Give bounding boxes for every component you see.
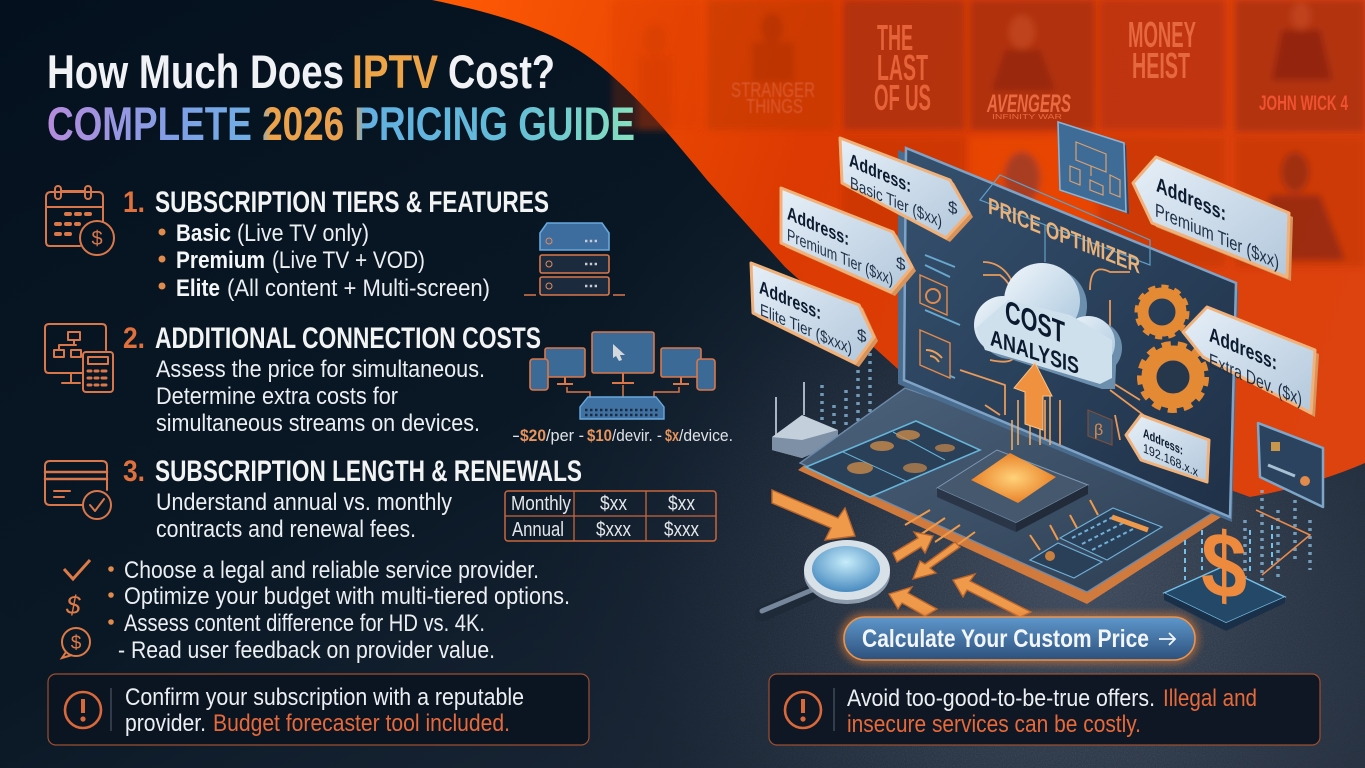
- poster row two: [843, 137, 1365, 267]
- tag: elite tier: Elite Tier ($xxx): [760, 300, 852, 358]
- callout text: insecure services can be costly.: [847, 711, 1141, 738]
- tag: premium tier right: Address:: [1156, 172, 1226, 226]
- illustration: price optimizer: [751, 122, 1323, 664]
- section 3: subscription length: [45, 455, 716, 543]
- device prices: $x: [665, 426, 679, 445]
- heading: SUBSCRIPTION TIERS & FEATURES: [155, 186, 549, 219]
- tag: premium tier right: [1133, 157, 1293, 281]
- description: [156, 356, 485, 437]
- title: COMPLETE 2026 PRICING GUIDE: [47, 97, 635, 150]
- tag: premium tier right: Premium Tier ($xx): [1155, 200, 1279, 274]
- description: Determine extra costs for: [156, 383, 398, 410]
- title: [47, 45, 635, 150]
- device prices: /device.: [679, 426, 733, 445]
- callout text: Illegal and: [1163, 685, 1257, 712]
- poster: Avengers: INFINITY WAR: [992, 114, 1062, 121]
- poster: Avengers: AVENGERS: [986, 90, 1071, 118]
- device prices: -: [512, 426, 520, 445]
- tag: extra device: Extra Dev. ($x): [1209, 350, 1302, 411]
- icon: server stack: [524, 223, 625, 295]
- callout text: Confirm your subscription with a reputable: [125, 684, 524, 711]
- monitor: [898, 148, 1238, 522]
- icon: dollar arrows: $: [65, 590, 81, 620]
- laptop base: [798, 388, 1232, 604]
- price optimizer heading: PRICE OPTIMIZER: [988, 193, 1140, 280]
- panel: orange poster wall: [432, 0, 1365, 497]
- tier list: Elite: [176, 275, 220, 302]
- icon: calendar with dollar: $: [91, 228, 103, 250]
- tier list: (All content + Multi-screen): [227, 275, 490, 302]
- tip bullets: - Read user feedback on provider value.: [118, 637, 495, 664]
- checklist tips: [62, 557, 570, 664]
- poster: The Last of Us: [843, 0, 965, 130]
- screen icon tiles: β: [1094, 422, 1103, 439]
- description: simultaneous streams on devices.: [156, 410, 480, 437]
- icon: dollar speech bubble: $: [71, 633, 82, 654]
- callout text: provider.: [125, 710, 206, 737]
- tag: extra device: [1183, 307, 1319, 417]
- background: [0, 199, 1365, 768]
- gear: small: [1137, 287, 1187, 337]
- callout text: Budget forecaster tool included.: [213, 710, 510, 737]
- table: contract pricing: Annual: [512, 519, 564, 541]
- icon: calendar with dollar: [46, 186, 114, 255]
- heading: SUBSCRIPTION LENGTH & RENEWALS: [155, 455, 582, 488]
- tip bullets: [108, 557, 570, 664]
- poster: unnamed left: [612, 0, 700, 130]
- poster: Money Heist: HEIST: [1132, 45, 1190, 86]
- number 3: 3.: [123, 455, 145, 488]
- tag: elite tier: $: [857, 324, 867, 347]
- dollar on circuit pad: [1164, 510, 1310, 631]
- tag: premium tier left: [781, 188, 916, 296]
- data dots: [822, 345, 1310, 590]
- button: calculate price: [840, 613, 1199, 664]
- cloud: cost analysis: COST: [1005, 293, 1065, 351]
- cloud: cost analysis: [974, 263, 1122, 389]
- tile: credit card: [1258, 423, 1323, 507]
- poster: The Last of Us: THE: [877, 17, 913, 58]
- calculator panel: [1030, 508, 1162, 578]
- description: Assess the price for simultaneous.: [156, 356, 485, 383]
- icon: monitor and calculator: [45, 324, 113, 392]
- arrows toward magnifier: [772, 490, 1031, 617]
- monitor circuit traces: [925, 175, 1150, 450]
- tag: ip address: 192.168.x.x: [1143, 441, 1198, 480]
- tag: extra device: Address:: [1209, 322, 1277, 375]
- poster: Stranger Things: [707, 0, 835, 130]
- device prices: $10: [587, 426, 612, 445]
- poster: John Wick 4: [1235, 0, 1365, 132]
- icon: connected devices: [530, 332, 715, 419]
- device prices: $20: [520, 426, 546, 445]
- number 1: 1.: [123, 186, 145, 219]
- tier list: Premium: [176, 247, 265, 274]
- title: How Much Does: [47, 45, 344, 98]
- cloud: cost analysis: ANALYSIS: [990, 326, 1079, 380]
- poster: Stranger Things: THINGS: [746, 96, 803, 118]
- router: [772, 382, 838, 458]
- poster: The Last of Us: LAST: [877, 47, 928, 88]
- callout: left confirm: [48, 674, 589, 745]
- button: calculate price: Calculate Your Custom Price: [862, 625, 1149, 653]
- tag: elite tier: Address:: [759, 277, 821, 324]
- heading: ADDITIONAL CONNECTION COSTS: [155, 322, 541, 355]
- tip bullets: Assess content difference for HD vs. 4K.: [124, 610, 485, 637]
- screen icon tiles: [920, 275, 1112, 445]
- monitor stand: [925, 390, 1195, 530]
- tag: premium tier left: Premium Tier ($xx): [787, 225, 893, 289]
- tag: premium tier left: $: [896, 252, 906, 275]
- gear: large: [1140, 344, 1206, 410]
- description: contracts and renewal fees.: [156, 516, 416, 543]
- tag: basic tier: [840, 138, 973, 242]
- device prices: /per -: [546, 426, 584, 445]
- magnifying glass: [762, 540, 890, 614]
- callout text: Avoid too-good-to-be-true offers.: [847, 685, 1155, 712]
- tier list: [158, 220, 490, 302]
- callout: right warning: [769, 674, 1320, 745]
- tag: basic tier: Basic Tier ($xx): [850, 173, 942, 231]
- device prices: /devir. -: [612, 426, 662, 445]
- callout text: [125, 684, 524, 737]
- tier list: (Live TV only): [237, 220, 369, 247]
- section 2: additional connection costs: [45, 322, 733, 445]
- tag: elite tier: [751, 263, 878, 367]
- tag: basic tier: $: [948, 196, 958, 219]
- tip bullets: Choose a legal and reliable service provider.: [124, 557, 539, 584]
- tag: ip address: [1126, 415, 1209, 482]
- icon: check: [64, 560, 90, 579]
- poster: Avengers: [970, 0, 1095, 130]
- title: Cost?: [448, 45, 555, 98]
- tile: network diagram: [1058, 122, 1129, 214]
- description: [156, 489, 452, 543]
- poster: The Last of Us: OF US: [874, 77, 931, 118]
- tier list: (Live TV + VOD): [272, 247, 425, 274]
- table: contract pricing: [505, 491, 716, 541]
- table: contract pricing: $xx: [668, 493, 695, 515]
- tag: premium tier left: Address:: [787, 203, 849, 250]
- table: contract pricing: $xx: [600, 493, 627, 515]
- dollar on circuit pad: $: [1201, 510, 1247, 620]
- processor chip: [905, 450, 1098, 550]
- callout text: [847, 685, 1257, 738]
- description: Understand annual vs. monthly: [156, 489, 452, 516]
- poster: Stranger Things: STRANGER: [731, 79, 815, 102]
- icon: warning: [785, 692, 821, 728]
- table: contract pricing: Monthly: [511, 493, 571, 515]
- section 1: subscription tiers: [46, 186, 625, 302]
- arrow: up: [1014, 363, 1052, 430]
- table: contract pricing: $xxx: [596, 519, 631, 541]
- keypad panel: [806, 421, 980, 497]
- tag: ip address: Address:: [1143, 426, 1183, 458]
- icon: card with check: [45, 461, 111, 519]
- title: IPTV: [352, 45, 439, 98]
- number 2: 2.: [123, 322, 145, 355]
- device prices: [512, 426, 733, 445]
- tip bullets: Optimize your budget with multi-tiered options.: [124, 583, 570, 610]
- tag: basic tier: Address:: [849, 150, 911, 197]
- tier list: Basic: [176, 220, 231, 247]
- poster: Money Heist: MONEY: [1128, 14, 1196, 55]
- table: contract pricing: $xxx: [664, 519, 699, 541]
- poster: Money Heist: [1100, 0, 1225, 130]
- icon: dollar speech bubble: [62, 628, 90, 658]
- icon: warning: [65, 692, 101, 728]
